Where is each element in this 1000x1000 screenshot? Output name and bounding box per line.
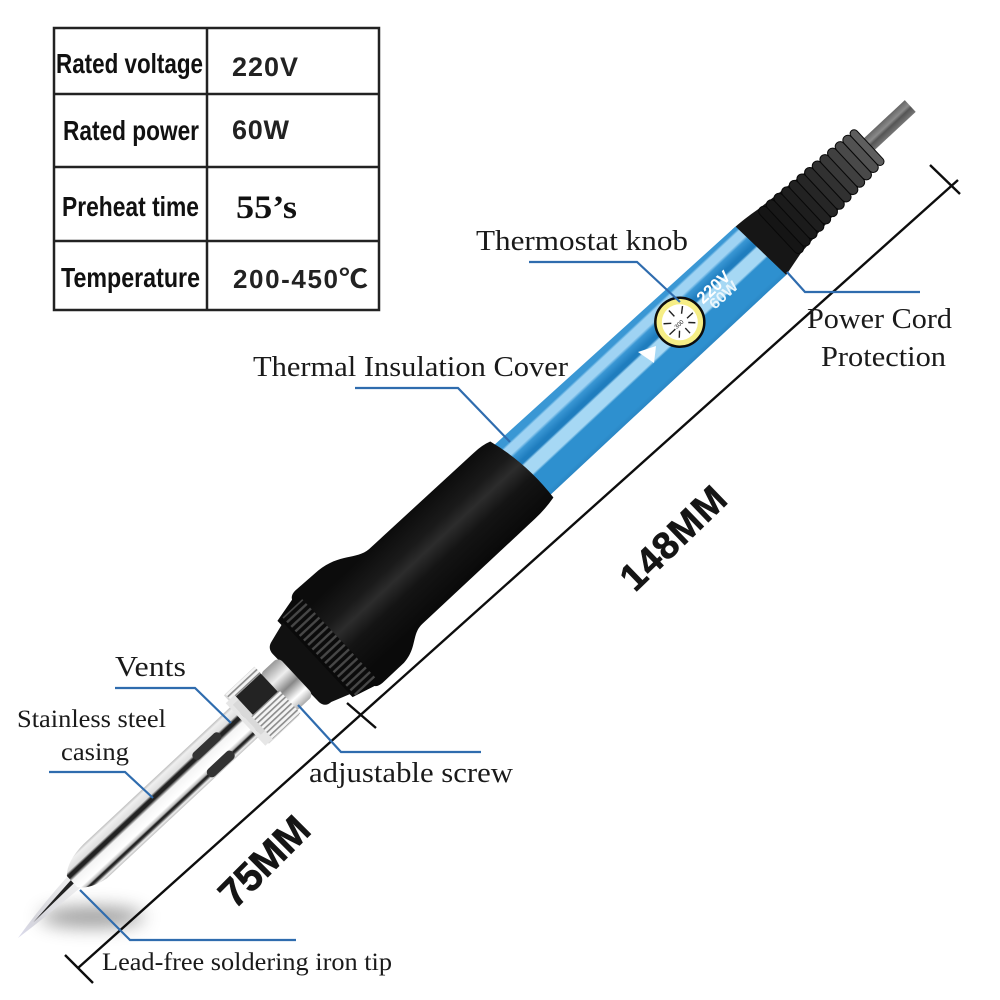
callout: power cord protection: Protection (821, 342, 946, 373)
handle nose (262, 622, 350, 714)
printed ratings (693, 267, 743, 316)
adjustable knurled nut (221, 665, 301, 746)
dimension label 75MM: 75MM (210, 807, 319, 916)
row: rated power: Rated power (63, 115, 199, 146)
middle tick (347, 703, 376, 728)
callout: thermostat knob (476, 226, 688, 302)
thermostat knob (645, 288, 714, 357)
callout: adjustable screw: adjustable screw (309, 758, 514, 789)
tip shadow (40, 907, 144, 927)
callout: stainless steel casing (17, 706, 166, 798)
row: temperature: ℃ (339, 264, 368, 294)
callout: lead-free tip: Lead-free soldering iron tip (102, 949, 392, 976)
thermostat knob: 300 (674, 319, 686, 331)
row: rated voltage: 220V (232, 52, 298, 82)
callout: thermal insulation cover (253, 352, 569, 442)
row: temperature: 200-450 (233, 264, 338, 294)
callout: vents (115, 652, 231, 723)
callout: thermostat knob: Thermostat knob (476, 226, 688, 257)
blue aluminium barrel (483, 220, 786, 510)
callout: power cord protection: Power Cord (807, 304, 952, 335)
row: temperature: Temperature (61, 262, 200, 293)
callout: thermal insulation cover: Thermal Insulation Cover (253, 352, 569, 383)
row: preheat time: Preheat time (62, 191, 199, 222)
printed ratings: 220V (693, 267, 735, 308)
row: rated voltage (56, 48, 298, 82)
strain relief sleeve (732, 121, 896, 281)
dimension label 148MM: 148MM (612, 478, 735, 599)
handle ribbed ring (273, 593, 381, 706)
metal neck (259, 657, 314, 713)
power cable (854, 100, 916, 160)
callout: vents: Vents (115, 652, 186, 683)
end tick (930, 165, 960, 194)
printed ratings: 60W (706, 277, 742, 313)
start tick (65, 955, 93, 983)
row: temperature (61, 262, 368, 294)
row: preheat time (62, 190, 297, 226)
stainless steel casing (59, 705, 261, 897)
direction arrow (638, 346, 656, 363)
vent upper (191, 731, 223, 762)
callout: lead-free tip (80, 890, 392, 976)
black handle (288, 418, 567, 690)
callout: power cord protection (787, 272, 952, 373)
tip (10, 871, 85, 942)
row: rated voltage: Rated voltage (56, 48, 203, 79)
specification table (53, 28, 379, 310)
dimension line: total length (65, 180, 958, 983)
callout: adjustable screw (298, 705, 514, 789)
vent lower (205, 749, 237, 779)
row: rated power: 60W (232, 115, 290, 145)
callout: stainless steel casing: Stainless steel (17, 706, 166, 733)
callout: stainless steel casing: casing (61, 739, 130, 766)
row: preheat time: 55’s (236, 190, 297, 226)
tip dark line (29, 874, 80, 922)
